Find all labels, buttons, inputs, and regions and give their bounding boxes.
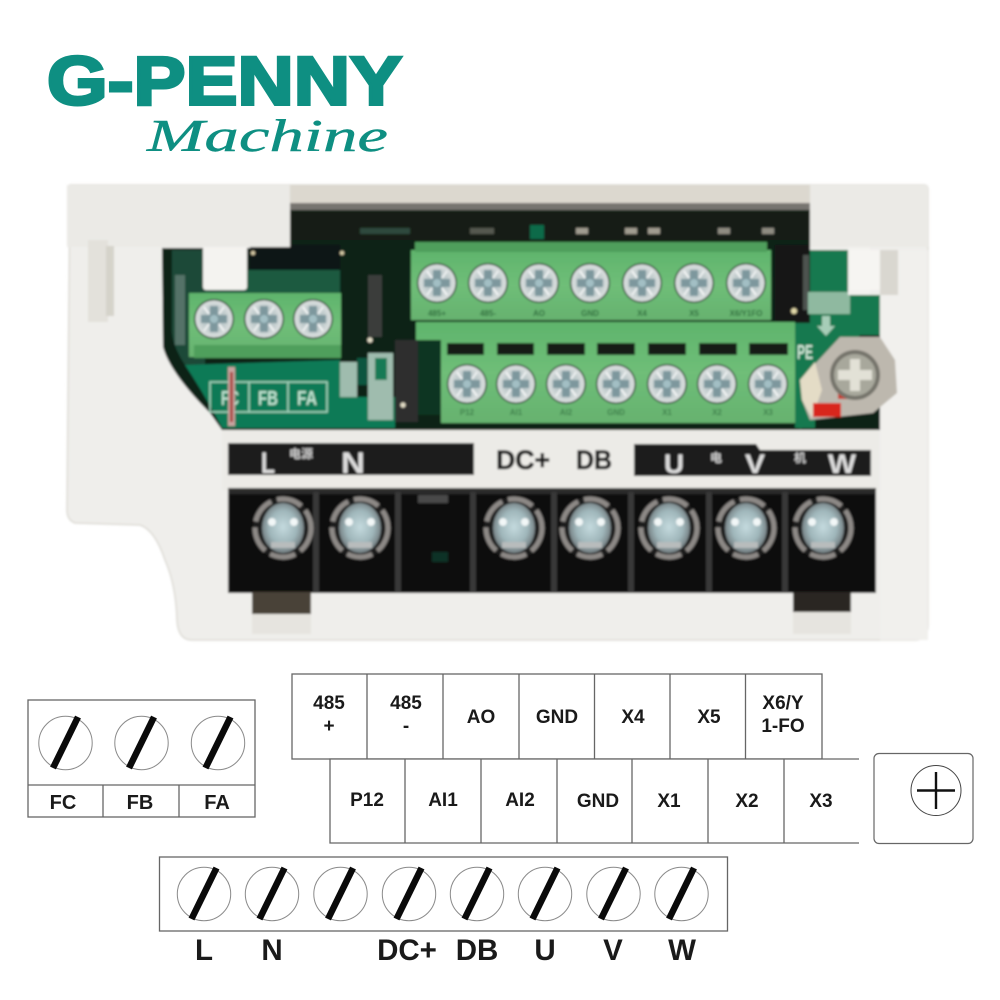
power terminal labels: L: [195, 934, 213, 967]
pins and jumpers: [205, 245, 810, 422]
labels: X1: [657, 791, 681, 812]
power terminal labels: DB: [456, 934, 498, 967]
DC+ DB label: DB: [576, 445, 612, 475]
FC screw: [194, 299, 234, 339]
screws: [253, 497, 853, 559]
L N label: N: [341, 447, 365, 480]
labels: +: [323, 716, 335, 737]
U V W label: 电: [710, 451, 722, 465]
printed labels: AO: [533, 309, 545, 318]
light strip above the power terminal labels: [222, 430, 880, 490]
printed labels: 485-: [480, 309, 496, 318]
labels: X5: [697, 707, 721, 728]
printed labels: 485+: [428, 309, 446, 318]
upper green terminal block: 485+ to X6: [411, 242, 771, 320]
power terminal labels: DC+: [377, 934, 437, 967]
power terminal labels: V: [603, 934, 623, 967]
DC+ DB label: [496, 445, 612, 475]
PE area on the right: [795, 250, 897, 430]
labels: AI1: [428, 790, 458, 811]
FC FB FA board labels: FB: [258, 388, 278, 410]
black power terminal block: [228, 488, 876, 593]
resistor: [228, 367, 235, 426]
printed labels: X6/Y1FO: [730, 309, 762, 318]
U V W label: W: [828, 449, 857, 479]
white peg: [203, 240, 247, 290]
labels: [50, 792, 230, 814]
labels: AO: [467, 707, 495, 728]
printed labels: GND: [607, 408, 625, 417]
labels: AI2: [505, 790, 535, 811]
labels: X4: [621, 707, 645, 728]
U V W label: 机: [794, 450, 806, 465]
printed labels: X1: [662, 408, 672, 417]
printed labels: [428, 309, 762, 318]
printed labels: [460, 408, 773, 417]
product photo: terminal area of the inverter: [67, 185, 928, 640]
U V W label: [634, 444, 871, 479]
labels: X2: [735, 791, 759, 812]
L N label: [228, 443, 474, 480]
wiring diagram: FC FB FA: [28, 700, 255, 817]
printed labels: AI1: [510, 408, 523, 417]
labels: X6/Y: [762, 693, 804, 714]
printed labels: X3: [763, 408, 773, 417]
DC+ DB label: DC+: [496, 445, 550, 475]
wiring diagram: lower control row: [330, 759, 859, 843]
labels: [313, 693, 805, 737]
left white tab: [162, 185, 290, 247]
FC FB FA green terminal block: [189, 240, 341, 358]
labels: FB: [127, 792, 153, 814]
printed labels: P12: [460, 408, 475, 417]
logo: [47, 42, 402, 161]
labels: GND: [577, 791, 619, 812]
L N label: 电源: [289, 446, 313, 461]
labels: FA: [204, 792, 230, 814]
screw symbols: [177, 867, 708, 921]
labels: 485: [313, 693, 345, 714]
lower green terminal block: P12 to X3: [416, 322, 795, 423]
L N label: L: [261, 447, 275, 480]
icon: ground screw box: [874, 754, 973, 844]
empty slot: [418, 495, 448, 503]
screws: [447, 364, 788, 404]
power terminal labels: W: [668, 934, 696, 967]
power terminal labels: U: [534, 934, 556, 967]
board dark left edge: [172, 250, 205, 365]
printed labels: X5: [689, 309, 699, 318]
printed labels: GND: [581, 309, 599, 318]
logo wordmark: G-PENNY: G-PENNY: [47, 42, 402, 120]
logo subtitle: Machine: Machine: [145, 111, 388, 161]
terminal slots: [447, 343, 788, 355]
power terminal labels: N: [261, 934, 283, 967]
screw symbols: [39, 716, 245, 770]
right white tab and peg: [810, 185, 928, 295]
PE area on the right: PE: [797, 342, 813, 364]
printed labels: AI2: [560, 408, 573, 417]
wiring diagram: upper control row: [292, 674, 822, 759]
green board area lower left: [185, 353, 395, 428]
printed labels: X2: [712, 408, 722, 417]
labels: FC: [50, 792, 76, 814]
U V W label: U: [664, 449, 684, 479]
labels: P12: [350, 790, 384, 811]
labels: [350, 790, 833, 812]
wiring diagram: power terminals: [160, 857, 728, 931]
ground screw and washer: [800, 337, 897, 420]
FC FB FA board labels: [210, 382, 327, 412]
FC FB FA board labels: FA: [297, 388, 317, 410]
circuit board opening: [162, 210, 880, 430]
labels: 1-FO: [761, 716, 805, 737]
labels: 485: [390, 693, 422, 714]
housing notches under the block: [252, 592, 851, 634]
printed labels: X4: [637, 309, 647, 318]
screws: [417, 263, 766, 303]
FB screw: [244, 299, 284, 339]
top component row: [290, 212, 810, 240]
dividers: [313, 492, 788, 592]
power label band: [228, 443, 871, 480]
FA screw: [293, 299, 333, 339]
power terminal labels: [195, 934, 696, 967]
labels: -: [403, 716, 409, 737]
labels: GND: [536, 707, 578, 728]
U V W label: V: [745, 449, 765, 479]
labels: X3: [809, 791, 833, 812]
housing body: [67, 185, 928, 640]
FC FB FA board labels: FC: [221, 388, 239, 410]
